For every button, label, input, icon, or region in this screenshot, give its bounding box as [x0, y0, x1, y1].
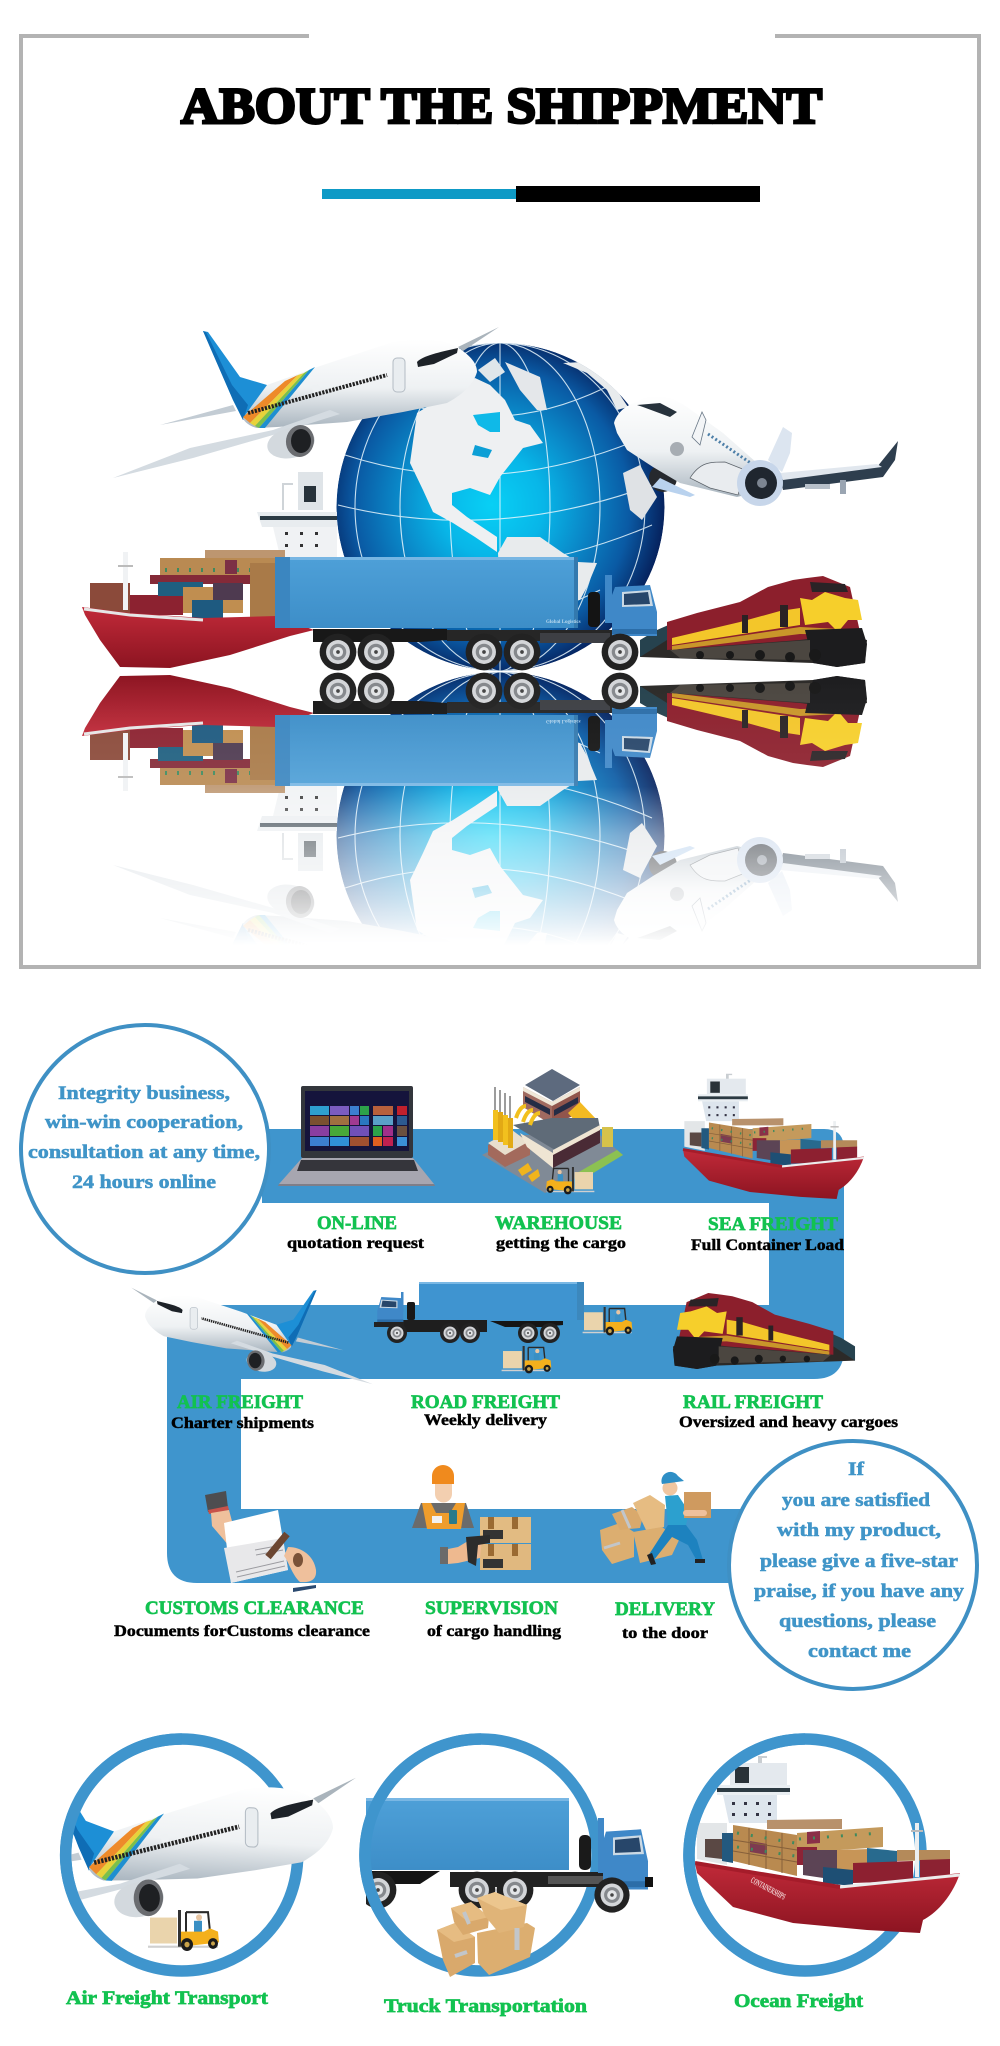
callout text: five-star: you are satisfied: [782, 1490, 930, 1511]
label: supervision: SUPERVISION: [425, 1598, 558, 1619]
callout text: five-star: If: [848, 1459, 865, 1480]
callout text: integrity: Integrity business,: [58, 1083, 230, 1104]
label: customs clearance: Documents forCustoms clearance: [114, 1623, 370, 1640]
label: air freight: [171, 1392, 314, 1432]
ring overlap left: [365, 1739, 481, 1956]
label: supervision: of cargo handling: [427, 1623, 561, 1640]
label: sea freight: [691, 1214, 844, 1254]
label: sea freight: Full Container Load: [691, 1237, 844, 1254]
callout text: five-star: praise, if you have any: [754, 1581, 965, 1602]
icon: warehouse: [482, 1069, 623, 1194]
panel: air freight transport: [60, 1733, 356, 2008]
panel: about the shipment frame: [21, 36, 979, 967]
callout text: integrity: consultation at any time,: [28, 1142, 260, 1163]
label: sea freight: SEA FREIGHT: [708, 1214, 838, 1235]
circle ring: [66, 1739, 298, 1971]
circle ring: [689, 1739, 921, 1971]
callout text: integrity: [28, 1083, 260, 1193]
icon: forklift below truck: [502, 1346, 551, 1373]
label: warehouse: [495, 1213, 626, 1252]
label: warehouse: getting the cargo: [496, 1235, 626, 1252]
label: air freight: Charter shipments: [171, 1415, 314, 1432]
icon: road freight truck: [374, 1282, 584, 1343]
label: on-line: [287, 1213, 425, 1252]
ring overlap left: [689, 1739, 805, 1956]
caption: Truck Transportation: [384, 1996, 587, 2017]
label: rail freight: Oversized and heavy cargoes: [679, 1414, 898, 1431]
label: rail freight: [679, 1392, 898, 1431]
callout text: integrity: win-win cooperation,: [45, 1112, 243, 1133]
callout text: integrity: 24 hours online: [72, 1172, 216, 1193]
icon: forklift: [148, 1910, 219, 1951]
callout text: five-star: with my product,: [777, 1520, 941, 1541]
icon: sea freight ship: [683, 1074, 864, 1199]
callout: integrity circle: [21, 1025, 269, 1273]
callout text: five-star: contact me: [808, 1641, 911, 1662]
panel: logistics process path: [21, 1025, 977, 1689]
icon: laptop: [278, 1086, 435, 1186]
ring overlap left: [66, 1739, 182, 1956]
callout text: five-star: questions, please: [779, 1611, 936, 1632]
label: delivery: [615, 1599, 715, 1642]
callout: five-star circle: [729, 1441, 977, 1689]
icon: delivery courier with boxes: [600, 1472, 711, 1565]
icon: container ship: [695, 1757, 960, 1933]
icon: airplane: [71, 1778, 356, 1918]
label: warehouse: WAREHOUSE: [495, 1213, 622, 1234]
callout text: five-star: please give a five-star: [760, 1551, 959, 1572]
panel: truck transportation: [360, 1739, 653, 2017]
hull lettering: CONTAINERSHIPS: [749, 1875, 787, 1902]
icon: customs stamp and document: [205, 1491, 316, 1592]
icon: cardboard boxes: [437, 1892, 535, 1977]
heading underline bar: [322, 186, 760, 202]
label: road freight: ROAD FREIGHT: [411, 1392, 560, 1413]
panel: ocean freight: [689, 1739, 960, 2012]
icon: air freight plane: [131, 1288, 373, 1384]
hero illustration: globe, planes, ship, truck, train: [82, 327, 898, 671]
circle ring: [365, 1739, 597, 1971]
callout text: five-star: [754, 1459, 965, 1662]
title: ABOUT THE SHIPPMENT: [181, 79, 822, 135]
caption: Ocean Freight: [734, 1991, 864, 2012]
label: supervision: [425, 1598, 561, 1640]
label: customs clearance: [114, 1598, 370, 1640]
label: customs clearance: CUSTOMS CLEARANCE: [145, 1598, 364, 1619]
icon: forklift near truck: [583, 1307, 632, 1336]
label: road freight: Weekly delivery: [424, 1412, 547, 1429]
label: on-line: ON-LINE: [317, 1213, 397, 1234]
process band: [167, 1129, 844, 1583]
label: air freight: AIR FREIGHT: [177, 1392, 303, 1413]
label: delivery: DELIVERY: [615, 1599, 715, 1620]
icon: supervision worker with scanner: [412, 1465, 531, 1570]
icon: truck: [360, 1798, 653, 1913]
label: road freight: [411, 1392, 560, 1429]
label: on-line: quotation request: [287, 1235, 425, 1252]
label: delivery: to the door: [622, 1625, 708, 1642]
icon: rail freight train: [673, 1293, 855, 1369]
hero reflection: [82, 672, 898, 938]
caption: Air Freight Transport: [66, 1988, 269, 2009]
label: rail freight: RAIL FREIGHT: [683, 1392, 823, 1413]
